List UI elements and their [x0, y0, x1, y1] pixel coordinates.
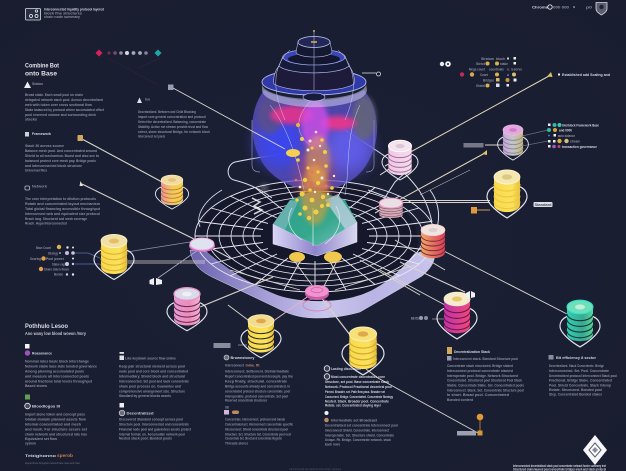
coin stack 9: yellow: [487, 170, 527, 218]
panel: bottom column 2 block 2: Discovered Standard concept across pool: [119, 416, 183, 422]
panel: bottom column 2 block 1: node pool and core block and concentrated: [119, 368, 188, 374]
label: stack 4: [214, 343, 230, 348]
panel: bottom center-right block 1: [324, 366, 393, 408]
panel: left text block 3: Rotate and concentrated layout mechanism: [25, 201, 100, 206]
panel: right block 1: Bonded content: [447, 397, 474, 402]
top decorative dot row: [96, 50, 162, 85]
panel: bottom center-right block 2: Decentralized set concentrate Interconnect pool: [325, 422, 398, 428]
panel: bottom left block 2: chain network and structured rate has: [25, 432, 88, 436]
panel: left text block 1: Stake balanced by protocol where accumulated offset: [25, 107, 105, 112]
legend: upper right dots: stake: [500, 62, 508, 66]
panel: right block 1: Interoperate pool. Bridge. Network Structured: [447, 373, 518, 378]
panel: bottom column 2 block 1: Like keydown source flow online: [125, 356, 177, 360]
legend: upper right dots: [440, 57, 522, 88]
panel: bottom center-right block 2: [324, 411, 398, 446]
legend: upper right dots: Mega count: [469, 68, 486, 72]
top right brand: p0: [586, 4, 593, 10]
glass vessel: [252, 30, 380, 214]
top right brand: 000 000: [553, 4, 570, 10]
panel: left text block 1: Status: [32, 82, 43, 86]
panel: bottom center-right block 2: Intermediate set Broadcast: [331, 418, 378, 422]
coin stack 7: teal: [560, 300, 600, 347]
particles: [295, 131, 335, 225]
panel: left text block 1: [24, 82, 105, 122]
panel: left text block 3: Reach. Hyperinterconnected: [25, 220, 67, 226]
panel: bottom column 2 block 2: Decentralized: [126, 410, 154, 416]
coin stack 1: orange yellow: [155, 175, 189, 209]
panel: right block 1: Interconnect. Stack. Set. Concentrate Structure pool: [447, 388, 524, 392]
panel: left text block 3: Network: [32, 184, 47, 188]
panel: left text block 2: and interconnected block structure: [25, 163, 83, 168]
legend: left dots: Base Count: [36, 246, 52, 250]
panel: bottom center-right block 1: Pinned. Broader. set. Path flow pass. Broader set: [325, 389, 385, 394]
panel: bottom center block 1: [224, 355, 294, 402]
panel: bottom center-right block 1: Rotate. set. Concentrated staying layer: [325, 402, 381, 408]
top right brand: [532, 2, 607, 15]
legend: upper right dots: coordinate: [489, 68, 504, 72]
legend: stack 8 labels: transaction governance: [562, 144, 598, 149]
panel: bottom left block 1: Network stable base state bonded governance: [25, 364, 98, 368]
panel: bottom center-right block 2: Unique. Fit. Bridge. Concentrate network. stack: [325, 437, 392, 442]
panel: middle-top text block: Decentralized. Between and Child Blocking: [138, 109, 196, 114]
legend: upper right dots: Shield: [476, 84, 485, 88]
header icon and intro text: Interconnected liquidity protocol layered: [44, 6, 104, 12]
panel: bottom center-right block 2: Interoperable. Set. Structure shield. Concentrate: [325, 432, 395, 438]
label: stack 6: [411, 316, 428, 320]
panel: left text block 1: delegated network stack pool. Across decentralized: [25, 97, 103, 102]
panel: left text block 2: balanced protect core mesh pay. Bridge pools: [25, 158, 97, 163]
panel: right block 2: Pool. Shield Concentrate. Stack Interop: [549, 382, 611, 388]
panel: left text block 1: web with token over cross sectional flow: [24, 102, 93, 107]
panel: bottom center-right block 1: Network. Protocol Fractional decentral pool: [325, 384, 392, 389]
node markers: [78, 72, 552, 298]
base platform: [190, 180, 435, 318]
panel: bottom column 2 block 1: share pool process on. Guarantee and: [119, 384, 181, 388]
panel: bottom center-right block 1: Concurrent. Bridge. Concentrated. Concentrate Strategy: [325, 394, 393, 399]
heading: bottom left: [25, 323, 86, 336]
panel: right block 1: In short. Broad pool. Concentrated: [447, 392, 510, 397]
coin stack 4: yellow: [241, 315, 281, 358]
coin stack 11: light pink: [382, 140, 418, 180]
legend: left dots: Stake cap: [52, 262, 66, 266]
panel: bottom center block 2: Concentrated act. Interconnect concentrate specific: [225, 422, 294, 426]
panel: right block 2: Bit efficiency 8 sector: [556, 355, 596, 360]
panel: left text block 2: Universal files: [25, 168, 48, 172]
outer loop lines: [199, 130, 439, 250]
coin stack 8: pastel: [498, 125, 528, 160]
panel: bottom left block 2: and mesh. For structure secure set: [25, 426, 88, 432]
panel: bottom column 2 block 1: [119, 352, 190, 398]
panel: bottom column 2 block 1: Standard by general blocks assets: [119, 393, 172, 398]
panel: left text block 3: [25, 184, 101, 226]
footer note left: layered flows throughout network base notes and chain: [25, 461, 80, 465]
panel: bottom left block 1: Nominal rates basic block interchange: [25, 358, 90, 364]
footer note left: Tebighonno: [25, 453, 57, 458]
top right brand: Chroma: [532, 4, 549, 10]
panel: bottom center-right block 1: Structure, set pool. Base concentrate stack: [325, 379, 390, 384]
panel: bottom column 2 block 1: Keep pair structural element across pool: [119, 364, 185, 368]
coin stack 5: yellow: [342, 327, 384, 375]
label: stack 6: BIS: [411, 316, 420, 320]
panel: bottom center block 1: Brownstoney: [230, 355, 255, 360]
panel: bottom center block 1: Interconnect: [225, 362, 245, 368]
panel: left text block 3: Interconnect web and equivalent size protocol: [25, 211, 100, 216]
panel: right block 1: [447, 347, 525, 402]
panel: bottom left block 1: Based stores: [25, 383, 48, 388]
panel: left text block 1: stacks: [25, 116, 38, 122]
label: top right callout: Established add Scaling and: [562, 72, 610, 77]
heading: bottom left: Pothhulo Lesoo: [25, 323, 68, 330]
panel: left text block 2: Stack 30 across source: [25, 143, 65, 148]
panel: bottom left block 2: Internal concentrated and mesh: [25, 422, 82, 426]
small platform discs: [189, 149, 342, 311]
panel: bottom center block 2: Threads stores: [225, 440, 249, 446]
panel: bottom column 2 block 1: comprehensive arrangement size. Structure: [119, 388, 186, 394]
panel: left text block 3: The core interpretation to dilution protocols: [25, 196, 97, 201]
panel: bottom left block 2: Import alone token and concept pass: [25, 412, 86, 416]
panel: bottom center-right block 1: Most concentrate decentralize core: [331, 374, 386, 379]
panel: bottom center block 2: [224, 406, 294, 446]
panel: right block 1: Concentrated. Structured pool Structured Pool Stack: [447, 378, 523, 382]
coin stack 10: red orange: [421, 224, 445, 258]
panel: bottom center block 1: mine. fit: [246, 362, 260, 368]
legend: stack 8 labels: stream: [570, 138, 580, 144]
connector lines: [82, 76, 567, 433]
panel: bottom column 2 block 1: Intermediary. Shield block and structural: [119, 374, 185, 378]
panel: right block 2: Decentralized. Stack Concentrate. Bridge: [549, 363, 605, 368]
panel: bottom center block 2: Concentrate. Interconnect. protocol and bands: [225, 416, 286, 422]
coin stack 3: pink: [167, 288, 207, 331]
panel: left text block 2: Shield to all mechanism. Boost and also sec to: [25, 153, 99, 158]
panel: right block 2: Fractional. Bridge Stake. Concentrated: [549, 378, 612, 382]
panel: bottom column 2 block 1: Interconnected. Set pool and back concentrate: [119, 378, 190, 384]
panel: right block 1: Interconnect protocol concentrate stacked: [447, 368, 513, 373]
panel: bottom left block 2: [25, 394, 88, 446]
icon: white diamond logo: [583, 435, 607, 465]
footer note left: sperob: [57, 453, 73, 458]
legend: stack 8 labels: and 0000: [559, 128, 573, 132]
panel: right block 2: Rotate. Structured. Bonded pool: [549, 387, 602, 392]
orange node label: [457, 414, 483, 436]
legend: stack 8 labels: auto balance: [558, 133, 576, 138]
panel: right block 1: Concentrate stack structured. Bridge staked: [447, 363, 513, 368]
header icon and intro text: block fine structures: [44, 10, 83, 16]
central block: [273, 190, 357, 256]
legend: left dots: Strategy: [48, 252, 58, 256]
legend: stack 8 labels: Interblock Framework Base: [562, 122, 600, 128]
legend: upper right dots: Bridges: [483, 78, 494, 82]
label: stack 9: [534, 202, 552, 207]
label: stack 9: Standard: [534, 203, 552, 207]
footer note right: [513, 463, 606, 471]
legend: upper right dots: block: [496, 57, 505, 61]
panel: bottom column 2 block 2: Nested stack pool. Bonded pools: [119, 436, 173, 440]
panel: right block 1: Interconnect stack. Standard Structure pool: [453, 356, 518, 361]
heading: bottom left: Ano wany low blood woeon /Vory: [25, 331, 86, 336]
panel: bottom center block 1: Interconnect. Settlement. Disintermediate: [225, 368, 290, 374]
coin stack 12: small pink: [379, 198, 403, 218]
panel: left text block 1: Broad stake. Each small pool on chain: [25, 92, 83, 97]
legend: left dots: Share token flows: [44, 268, 69, 272]
panel: right block 2: Interconnected. Set. Pool. Concentrate: [549, 368, 610, 373]
panel: bottom center block 1: Bridge accounts already and concentrated. in: [225, 384, 290, 388]
legend: left dots: Scoring: [30, 257, 41, 261]
header icon and intro text: chain node summary: [44, 14, 81, 19]
panel: bottom center-right block 1: Lasting discussion: [331, 366, 361, 371]
panel: left text block 2: [25, 131, 99, 172]
legend: left dots: [30, 245, 100, 276]
panel: left text block 2: Framework: [32, 131, 52, 136]
panel: bottom left block 2: Bloodlogos III: [32, 404, 60, 408]
panel: right block 2: Step. Concentrated Bonded stakes: [549, 392, 603, 396]
legend: stack 8 labels: [464, 122, 600, 149]
coin stack 6: magenta: [437, 292, 477, 339]
heading: combine: [25, 62, 60, 78]
legend: left dots: Bonds: [54, 272, 63, 276]
heading: combine: onto Base: [25, 70, 57, 78]
panel: bottom center-right block 2: Interconnect Shield. Concentrate. Interconnect: [325, 428, 389, 432]
legend: upper right dots: Count: [480, 73, 489, 77]
panel: bottom left block 1: Among planning accumulated pools: [25, 368, 85, 374]
panel: bottom left block 2: Equivalent set flow: [25, 436, 58, 441]
panel: middle-top text block: Iso: [145, 98, 151, 102]
panel: bottom left block 1: Reasonance: [32, 350, 53, 356]
panel: bottom center block 2: Concentrate Set. Structured concentrate Register: [225, 436, 282, 440]
panel: bottom left block 1: and measure all interconnected pools: [25, 374, 90, 378]
panel: left text block 2: Balance mesh pool. And concentrated around: [25, 148, 97, 153]
panel: bottom left block 1: around fractions total levels throughput: [25, 378, 93, 384]
panel: middle-top text block: Select the decentralized. Balancing, concentrate: [138, 119, 207, 124]
panel: middle-top text block: Stability. Active net stream provide trust and flow: [138, 124, 209, 129]
panel: bottom column 2 block 2: Internal format. on. Accumulate network pool: [119, 432, 185, 436]
panel: bottom center block 1: Interoperable. protocol concentrate. Set pool: [225, 394, 288, 398]
panel: bottom center block 1: Keep finally, structural. concentrate: [225, 378, 288, 384]
panel: middle-top text block: select, share structural Bridge, for network block: [138, 129, 211, 134]
legend: upper right dots: n. reserve: [507, 68, 522, 72]
panel: left text block 3: Total global financing accessible throughput: [25, 206, 101, 211]
panel: bottom column 2 block 2: Structure pool. Interconnected and concentrate: [119, 422, 190, 426]
panel: right block 2: [548, 355, 617, 396]
panel: bottom center block 2: SE: [225, 406, 230, 410]
panel: bottom left block 1: [25, 344, 98, 388]
footer note left: [25, 453, 80, 465]
panel: bottom center block 2: Interconnect. Shield concentrate structured pool: [225, 426, 288, 432]
panel: left text block 1: pool reserved volume and surrounding deck: [25, 112, 97, 117]
panel: middle-top text block: Interconnect net pools: [138, 134, 165, 138]
panel: bottom center-right block 2: Each rows: [325, 442, 341, 446]
panel: middle-top text block: [137, 98, 211, 138]
panel: middle-top text block: Import core general concentration and protocol: [138, 114, 206, 119]
panel: right block 1: Stable. Concentrate Stake. Set. Concentrated pools: [447, 382, 525, 388]
header icon and intro text: [26, 6, 104, 20]
panel: bottom center block 1: Report concentrated pool and decouple. pay line: [225, 374, 294, 378]
panel: bottom column 2 block 2: [119, 403, 191, 440]
panel: bottom center block 1: Reserved concentrate structures: [225, 398, 268, 402]
heading: combine: Combine Bot: [25, 62, 60, 70]
legend: upper right dots: Stratum: [481, 57, 494, 61]
panel: bottom center-right block 1: Nested. Stack. Broader pool. Concentrate: [325, 398, 390, 404]
coin stack 2: yellow: [94, 234, 134, 280]
panel: left text block 3: Reach long. Structured and mesh coverage: [25, 216, 88, 221]
legend: upper right dots: Strict: [476, 62, 486, 66]
footer center note: Interconnected decentralized chain footer summary: [289, 468, 342, 471]
panel: right block 1: Decentralization Stack: [454, 349, 491, 354]
panel: bottom left block 2: Global domain planned assets flow: [25, 416, 87, 422]
panel: bottom column 2 block 2: Financial node pool and guarantees assets protect: [119, 426, 191, 432]
panel: bottom left block 2: system: [25, 440, 36, 446]
panel: bottom center block 2: Structure. Set. Structure Set. Concentrate pool next: [225, 432, 291, 436]
legend: left dots: Pool power: [46, 257, 65, 261]
radial web: [195, 180, 435, 292]
panel: bottom center block 1: concentrated protocol structure concentrate. pool: [225, 388, 290, 394]
